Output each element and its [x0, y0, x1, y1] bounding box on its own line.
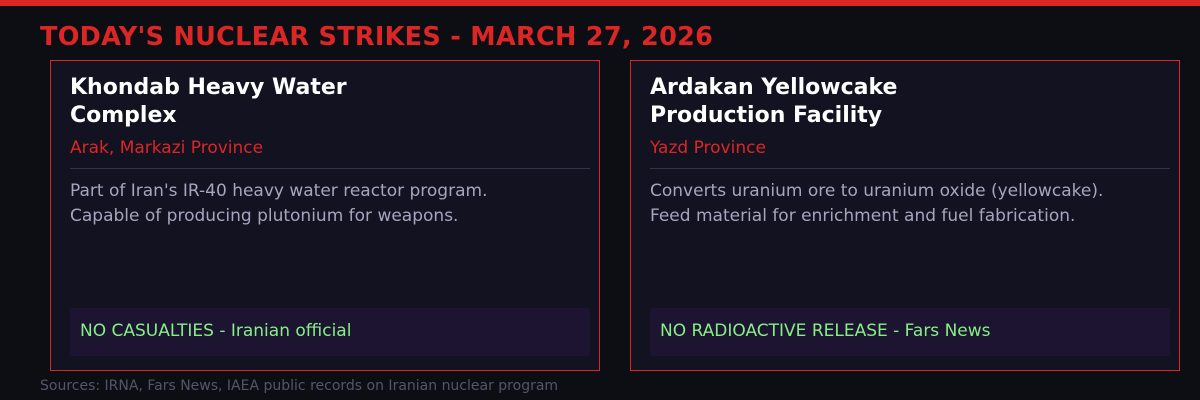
title: TODAY'S NUCLEAR STRIKES - MARCH 27, 2026: [40, 22, 713, 52]
description: Part of Iran's IR-40 heavy water reactor program.: [70, 181, 487, 201]
card title: Production Facility: [650, 103, 882, 128]
sources: Sources: IRNA, Fars News, IAEA public records on Iranian nuclear program: [40, 378, 558, 394]
location: Arak, Markazi Province: [70, 138, 263, 158]
status callout: [650, 308, 1170, 356]
panel: Ardakan: [630, 60, 1180, 371]
status callout: [70, 308, 590, 356]
card title: [650, 75, 897, 128]
card title: Khondab Heavy Water: [70, 75, 347, 100]
status callout: NO CASUALTIES - Iranian official: [80, 321, 351, 341]
panel: Khondab: [50, 60, 600, 371]
description: Capable of producing plutonium for weapons.: [70, 206, 458, 226]
description: Feed material for enrichment and fuel fabrication.: [650, 206, 1075, 226]
location: Yazd Province: [650, 138, 766, 158]
card title: Complex: [70, 103, 177, 128]
card title: Ardakan Yellowcake: [650, 75, 897, 100]
status callout: NO RADIOACTIVE RELEASE - Fars News: [660, 321, 991, 341]
description: Converts uranium ore to uranium oxide (yellowcake).: [650, 181, 1103, 201]
description: [70, 181, 487, 226]
description: [650, 181, 1103, 226]
card title: [70, 75, 347, 128]
